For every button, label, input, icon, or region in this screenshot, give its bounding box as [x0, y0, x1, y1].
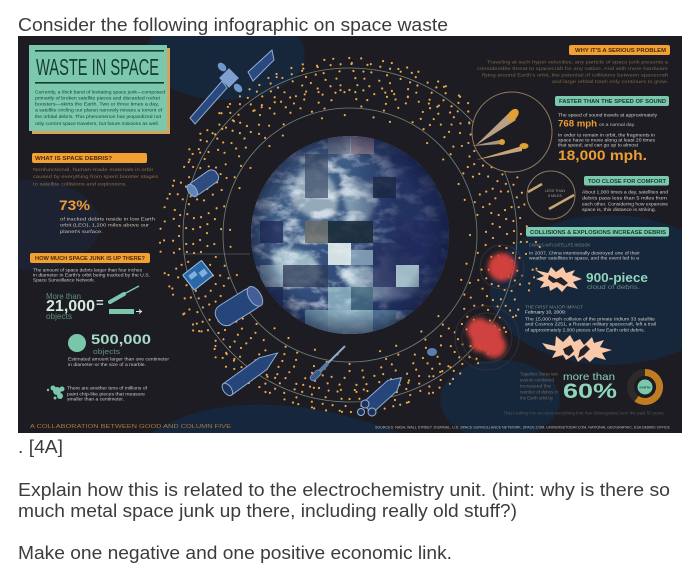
problem text: and large orbital trash only continues to grow.: [552, 79, 668, 84]
comfort text: debris pass less than 5 miles from: [582, 196, 668, 200]
stat: 500,000 objects: 500,000: [91, 331, 151, 347]
tracking text: in diameter in Earth's orbit being tracked by the U.S.: [33, 272, 150, 278]
together text: events combined: [520, 378, 555, 382]
stat: 21,000 objects: =: [96, 295, 104, 310]
intro text: a satellite circling our planet narrowly misses a torrent of: [35, 108, 163, 112]
problem text: Traveling at such hyper velocities, any particle of space junk presents a: [487, 60, 669, 64]
definition text: to satellite collisions and explosions.: [33, 182, 127, 188]
earth: [250, 135, 450, 335]
heading pill: WHAT IS SPACE DEBRIS?: [35, 156, 112, 162]
section: too close for comfort: [582, 176, 669, 212]
title: WASTE IN SPACE: [36, 54, 159, 80]
paint chip description: smaller than a centimeter.: [67, 396, 124, 402]
sources line: SOURCES: NASA, WALL STREET JOURNAL, U.S. SPACE SURVEILLANCE NETWORK, SPACE.COM, UNIVERSETODAY.COM, NATIONAL GEOGRAPHIC, ESA DEBRIS OFFICE: [375, 424, 670, 430]
economic link prompt: Make one negative and one positive economic link.: [18, 543, 452, 563]
question text: [18, 480, 670, 521]
comfort text: each other. Considering how expansive: [582, 202, 669, 206]
section: faster than the speed of sound: [555, 96, 669, 163]
first major impact text: February 10, 2009:: [525, 310, 566, 314]
heading pill: [30, 253, 150, 263]
intro text: primarily of broken satellite pieces and discarded rocket: [35, 96, 161, 100]
magnified circle: fast fragments: [472, 92, 552, 172]
orbit speed text: [558, 132, 656, 148]
first major impact text: THE FIRST MAJOR IMPACT: [525, 304, 583, 310]
comfort text: About 1,000 times a day, satellites and: [582, 190, 669, 194]
stat description: planet's surface.: [60, 229, 103, 235]
heading pill: [569, 45, 670, 55]
explosion: red blast upper: [480, 245, 524, 289]
stat caption: cloud of debris.: [587, 284, 640, 291]
section: why it's a serious problem: [477, 45, 670, 84]
orbit speed text: space have to move along at least 20 times: [558, 138, 655, 142]
icon: satellite: [190, 50, 274, 124]
stat: 768 mph: [558, 118, 635, 130]
500,000 description: in diameter-or the size of a marble.: [68, 362, 146, 367]
stat: 768 mph: 768 mph: [558, 118, 597, 130]
donut chart: earth debris share: [630, 372, 660, 402]
together text: [520, 372, 559, 400]
stat: 21,000 objects: 21,000: [46, 298, 95, 315]
stat description: of tracked debris reside in low Earth: [60, 216, 155, 222]
stat: 900-piece: 900-piece: [586, 270, 648, 285]
orbit speed text: that speed, and can go up to almost: [558, 142, 639, 148]
China mission text: CHINA'S ANTI-SATELLITE MISSION: [529, 242, 590, 248]
question text: Explain how this is related to the electrochemistry unit. (hint: why is there so: [18, 480, 670, 500]
donut chart: earth debris share: EARTH: [640, 386, 650, 390]
section: collisions and explosions: [503, 227, 669, 416]
problem text: flying around Earth's orbit, the potential of collisions between spacecraft: [482, 72, 669, 78]
problem text: [477, 60, 669, 84]
icon: broken satellite panel: [183, 260, 213, 290]
orbit speed text: In order to remain in orbit, the fragments in: [558, 132, 656, 138]
icon: small debris ball: [427, 348, 437, 356]
comfort text: space is, this distance is striking.: [582, 207, 656, 212]
icon: rocket stage: [222, 352, 278, 396]
first major impact text: [525, 304, 656, 332]
comfort text: [582, 190, 669, 212]
earth mosaic tiles: [260, 135, 441, 335]
page heading: Consider the following infographic on space waste: [18, 15, 448, 35]
stat: 21,000 objects: More than: [46, 292, 81, 301]
China mission text: [529, 242, 641, 260]
section: how much space junk: [30, 253, 170, 402]
magnified circle: close pass: [527, 171, 575, 219]
stat: more than 60%: 60%: [563, 380, 617, 403]
heading pill: COLLISIONS & EXPLOSIONS INCREASE DEBRIS: [530, 230, 667, 236]
stat description: [60, 216, 155, 235]
paint chip description: paint chip-like pieces that measure: [67, 392, 146, 396]
starburst: colliding satellites: [542, 335, 612, 362]
title card: [29, 45, 170, 134]
question text: much metal space junk up there, including really old stuff?): [18, 501, 517, 521]
closing note: That's taking into account everything that has disintegrated over the past 50 years.: [503, 410, 665, 416]
together text: increased the: [520, 384, 552, 388]
stat: 21,000 objects: objects: [46, 312, 72, 321]
intro text: [35, 90, 166, 126]
heading pill: FASTER THAN THE SPEED OF SOUND: [559, 99, 666, 105]
starburst: destroyed satellite: [535, 267, 582, 292]
explosion: red blast lower: [455, 306, 519, 370]
first major impact text: of approximately 2,000 pieces of low Earth orbit debris.: [525, 328, 645, 332]
earth cloud texture: [250, 135, 450, 335]
question reference: . [4A]: [18, 437, 63, 457]
definition text: caused by everything from spent booster stages: [33, 174, 159, 180]
paint chip description: There are another tens of millions of: [67, 386, 148, 390]
icon: spent cylinder: [214, 286, 264, 326]
stat: more than 60%: more than: [563, 371, 615, 383]
stat description: orbit (LEO), 1,200 miles above our: [60, 222, 149, 228]
together text: number of debris in: [520, 390, 559, 394]
icon: rocket booster: [357, 377, 402, 416]
intro text: only current space travelers, but future missions as well.: [35, 121, 159, 126]
first major impact text: The 15,000 mph collision of the private Iridium 33 satellite: [525, 316, 656, 322]
stat: 21,000 objects: [46, 292, 104, 321]
tracking text: [33, 268, 150, 282]
icon: screwdriver comparison: [109, 286, 142, 314]
section: what is space debris: [32, 153, 159, 235]
stat: 18,000 mph: 18,000 mph.: [558, 147, 647, 163]
heading pill: HOW MUCH SPACE JUNK IS UP THERE?: [35, 256, 145, 262]
definition text: Nonfunctional, human-made materials in orbit: [33, 167, 154, 173]
orbit rings and debris field: [160, 58, 540, 412]
China mission text: weather satellites in space, and the event led to a: [529, 256, 640, 260]
footer credit: A COLLABORATION BETWEEN GOOD AND COLUMN FIVE: [30, 424, 231, 430]
icon: lost screwdriver: [309, 344, 347, 382]
China mission text: In 2007, China intentionally destroyed one of their: [529, 250, 641, 256]
definition text: [33, 167, 159, 188]
stat: 768 mph: on a normal day.: [599, 122, 635, 127]
stat: 500,000 objects: [68, 334, 150, 356]
heading pill: WHY IT'S A SERIOUS PROBLEM: [575, 48, 666, 54]
heading pill: [526, 227, 669, 236]
together text: Together, these two: [520, 372, 559, 376]
intro text: boosters—skirts the Earth. Two or three times a day,: [35, 102, 159, 106]
intro text: the orbital debris. This phenomenon has jeopardized not: [35, 114, 162, 119]
tracking text: The amount of space debris larger than four inches: [33, 268, 142, 272]
icon: paint chips: [47, 386, 64, 400]
sound speed text: The speed of sound travels at approximately: [558, 112, 658, 118]
magnified circle: close pass: LESS THAN: [545, 189, 566, 193]
first major impact text: and Cosmos 2251, a Russian military spacecraft, left a trail: [525, 322, 656, 326]
paint chip description: [67, 386, 148, 402]
stat: 500,000 objects: objects: [93, 349, 121, 356]
infographic panel: [18, 36, 682, 433]
together text: the Earth orbit by: [520, 396, 554, 400]
500,000 description: Estimated amount larger than one centimeter: [68, 356, 170, 362]
intro text: Currently, a thick band of levitating space junk—composed: [35, 90, 166, 94]
heading pill: TOO CLOSE FOR COMFORT: [588, 179, 666, 185]
stat: 73%: 73%: [59, 197, 91, 213]
icon: debris canister: [186, 169, 220, 198]
500,000 description: [68, 357, 169, 366]
stat: more than 60%: [563, 371, 617, 403]
tracking text: Space Surveillance Network.: [33, 278, 95, 282]
magnified circle: close pass: 5 MILES: [548, 194, 562, 198]
problem text: considerable threat to spacecraft for any nation. And with more hardware: [477, 66, 669, 71]
